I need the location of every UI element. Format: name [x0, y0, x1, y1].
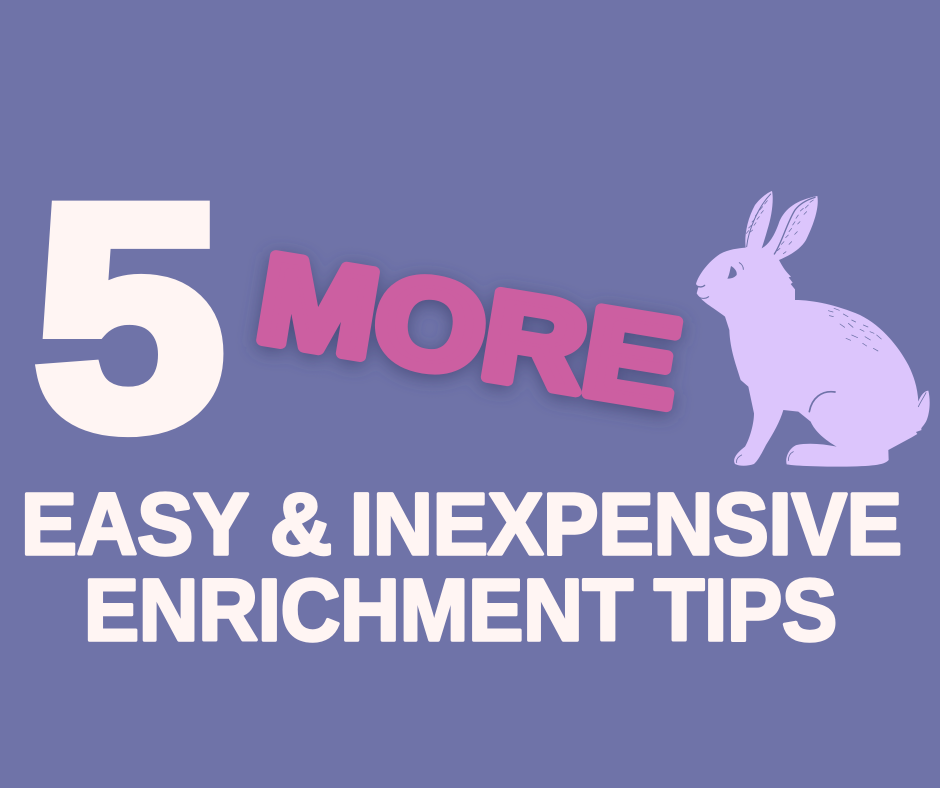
headline line 1: EASY — [21, 476, 249, 573]
headline line 2: ENRICHMENT — [84, 562, 633, 659]
rotated word MORE with shadow: MORE — [248, 232, 689, 438]
headline line 1: INEXPENSIVE — [350, 476, 902, 573]
rotated word MORE with shadow: MORE — [249, 228, 690, 434]
icon: rabbit — [696, 191, 930, 467]
big number 5: 5 — [34, 140, 224, 493]
headline line 1: & — [270, 476, 332, 573]
headline line 1 — [21, 476, 902, 573]
headline line 2: TIPS — [654, 562, 837, 659]
